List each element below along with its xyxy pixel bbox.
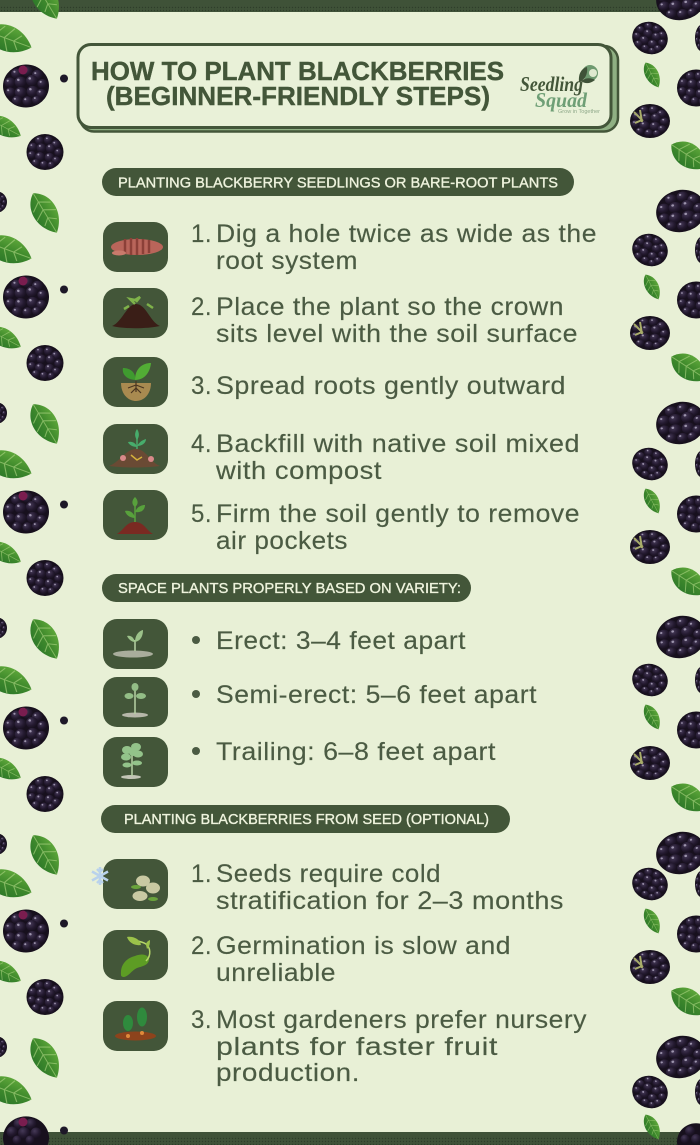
section header: spacing [102,574,471,602]
text: Seeds require cold [216,860,441,888]
bullet [192,747,200,755]
text: plants for faster fruit [216,1033,498,1061]
spacing: semi-erect [103,677,537,727]
text: Trailing: 6–8 feet apart [216,738,496,766]
seed step 3 [103,1001,587,1087]
text: Erect: 3–4 feet apart [216,627,466,655]
text: production. [216,1059,360,1087]
bullet [192,690,200,698]
text: 2. [191,293,212,321]
section header: from seed [101,805,510,833]
icon: snowflake [92,867,108,885]
icon: medium seedling [103,677,168,727]
text: unreliable [216,959,336,987]
section header: seedlings or bare-root: PLANTING BLACKBERRY SEEDLINGS OR BARE-ROOT PLANTS [118,176,558,192]
text [191,430,580,485]
section header: seedlings or bare-root [102,168,574,196]
logo: Seedling Squad: Grow in Together [558,109,600,115]
text: 5. [191,500,212,528]
icon: sprout on firmed soil [103,490,168,540]
text: Semi-erect: 5–6 feet apart [216,681,537,709]
text [191,293,578,348]
text [191,500,580,555]
text [191,220,597,275]
logo: Seedling Squad: Seedling [520,72,583,96]
logo: Seedling Squad: Squad [535,88,587,112]
top border bar [0,0,700,12]
step 2 [103,288,578,348]
text: sits level with the soil surface [216,320,578,348]
seed step 1 [92,859,564,915]
decoration: right column of blackberries and leaves [630,0,700,1145]
logo: Seedling Squad [520,65,600,115]
icon: dug hole [103,222,168,272]
text: 1. [191,860,212,888]
text: with compost [215,457,382,485]
step 1 [103,220,597,275]
step 4 [103,424,580,485]
bullet [192,636,200,644]
icon: germinating bean [103,930,168,980]
icon: plant roots in soil [103,357,168,407]
step 5 [103,490,580,555]
text: stratification for 2–3 months [216,887,564,915]
text: 1. [191,220,212,248]
text [191,860,564,915]
icon: leafy plant [103,737,168,787]
text: Spread roots gently outward [216,372,566,400]
section header: spacing: SPACE PLANTS PROPERLY BASED ON VARIETY: [118,581,461,597]
text: 3. [191,372,212,400]
text: Backfill with native soil mixed [216,430,580,458]
spacing: erect [103,619,466,669]
seed step 2 [103,930,511,987]
text: Most gardeners prefer nursery [216,1006,587,1034]
icon: small seedling [103,619,168,669]
text: Dig a hole twice as wide as the [216,220,597,248]
decoration: left column of blackberries and leaves [0,0,68,1145]
section header: from seed: PLANTING BLACKBERRIES FROM SEED (OPTIONAL) [124,812,489,828]
icon: soil mixed with compost [103,424,168,474]
text: Firm the soil gently to remove [216,500,580,528]
text: Germination is slow and [216,932,511,960]
spacing: trailing [103,737,496,787]
text: air pockets [216,527,348,555]
heading: (BEGINNER-FRIENDLY STEPS) [106,81,490,111]
text: Place the plant so the crown [216,293,564,321]
text: 3. [191,1006,212,1034]
text [191,1006,587,1087]
bottom border bar [0,1132,700,1145]
step 3 [103,357,566,407]
heading [91,56,504,111]
text: root system [216,247,358,275]
title panel [78,44,618,132]
icon: soil mound with sprouts [103,288,168,338]
heading: HOW TO PLANT BLACKBERRIES [91,56,504,86]
text [191,932,511,987]
text: 2. [191,932,212,960]
icon: seeds [103,859,168,909]
text: 4. [191,430,212,458]
icon: nursery plants in soil [103,1001,168,1051]
